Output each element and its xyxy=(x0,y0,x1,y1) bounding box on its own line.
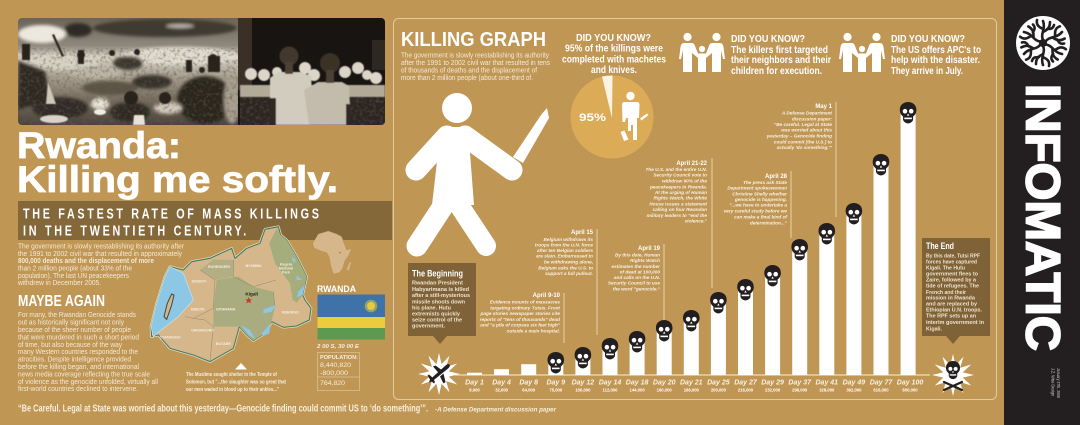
annotation: May 1: could commit [the U.S.] to xyxy=(774,139,832,144)
subtitle band: THE FASTEST RATE OF MASS KILLINGS xyxy=(23,205,319,222)
annotation: April 21-22: The U.S. and the entire U.N. xyxy=(646,167,707,172)
death counts: 328,000 xyxy=(819,388,835,392)
day labels: Day 18 xyxy=(626,380,648,386)
annotation: April 19: Rights Watch xyxy=(630,258,660,263)
annotation: April 19: and calls on the U.N. xyxy=(614,275,660,280)
intro text: The government is slowly reestablishing its authority xyxy=(401,52,549,59)
callout: the beginning: his plane. Hutu xyxy=(412,305,451,311)
annotation: April 9-10 xyxy=(480,293,564,343)
text block: maybe again: of time, but also because of the way xyxy=(18,342,122,349)
annotation: April 21-22: violence." xyxy=(685,219,708,224)
quote footer: -A Defense Department discussion paper xyxy=(435,406,556,414)
did you know: APCs: DID YOU KNOW? xyxy=(891,33,965,45)
annotation: April 28: April 28 xyxy=(765,174,788,180)
triangle marker xyxy=(235,363,247,370)
callout: the end: interim government in xyxy=(926,320,985,326)
annotation: April 21-22 xyxy=(646,158,712,288)
map of Rwanda: National xyxy=(279,267,293,271)
annotation: April 28: determination..." xyxy=(750,220,788,225)
map of Rwanda: GISENYI xyxy=(192,279,206,283)
death counts: 168,000 xyxy=(684,388,700,392)
intro text block: withdrew in December 2005. xyxy=(17,280,101,287)
day labels: Day 20 xyxy=(653,380,676,386)
credits: J.Z. Wise Design xyxy=(1050,368,1056,396)
callout: the beginning: after a still-mysterious xyxy=(412,293,470,299)
subtitle band: IN THE TWENTIETH CENTURY. xyxy=(23,222,246,239)
map of Rwanda: GIKONGORO xyxy=(191,328,214,332)
map of Rwanda: RUHENGERI xyxy=(208,265,230,269)
callout: the end xyxy=(922,238,990,344)
callout: the end: Kigali. xyxy=(926,326,942,332)
day labels: Day 77 xyxy=(870,380,893,386)
did you know: neighbors: DID YOU KNOW? xyxy=(731,33,805,45)
death counts: 216,000 xyxy=(738,388,754,392)
text block: maybe again: that were murdered in such a short period xyxy=(18,334,139,341)
map of Rwanda: KIBUYE xyxy=(191,307,205,311)
day labels: Day 100 xyxy=(897,380,923,386)
day labels: Day 41 xyxy=(816,380,838,386)
callout: the beginning: extremists quickly xyxy=(412,311,461,317)
callout: the end: The End xyxy=(926,241,954,251)
death counts: 8,000 xyxy=(469,388,480,392)
day labels: Day 1 xyxy=(465,380,484,386)
population box: 8,440,820 xyxy=(320,363,352,369)
map of Rwanda: CYANGUGU xyxy=(159,336,181,340)
text block: maybe again xyxy=(18,312,158,393)
panel: killing graph xyxy=(394,18,996,400)
annotation: May 1: yesterday – Genocide finding xyxy=(766,133,832,138)
callout: the beginning: missile shoots down xyxy=(412,299,465,305)
death counts: 200,000 xyxy=(711,388,727,392)
brand name: INFOMATIC xyxy=(1016,84,1070,351)
quote footer: “Be Careful. Legal at State was worried about this yesterday—Genocide finding could commit US to ‘do something’”. xyxy=(18,404,428,414)
title xyxy=(17,125,338,200)
callout: the end: government flees to xyxy=(926,272,979,278)
map caption: The Muslims sought shelter in the Temple of xyxy=(186,372,277,378)
callout: the end: Zaire, followed by a xyxy=(926,278,977,284)
map caption: our men waded in blood up to their ankles..." xyxy=(186,387,279,393)
intro text: after the 1991 to 2002 civil war that resulted in tens xyxy=(401,60,550,67)
intro text block: the 1991 to 2002 civil war that resulted in approximately xyxy=(18,251,182,258)
did you know: APCs: They arrive in July. xyxy=(891,65,963,77)
skulls xyxy=(548,102,916,373)
heading: Rwanda: RWANDA xyxy=(317,284,356,294)
death counts: 144,000 xyxy=(630,388,645,392)
annotation: April 15: be withdrawing alone, xyxy=(544,260,593,265)
did you know: neighbors: their neighbors and their xyxy=(731,54,831,66)
annotation: May 1: discussion paper: xyxy=(792,116,832,121)
callout: the beginning: government. xyxy=(412,323,445,329)
death counts: 100,000 xyxy=(575,388,591,392)
callout: the beginning xyxy=(408,263,476,344)
day labels xyxy=(465,380,923,386)
annotation: April 28: "...we have to undertake a xyxy=(729,203,787,208)
icon: family xyxy=(679,33,725,72)
callout: the end: Ethiopian U.N. troops. xyxy=(926,308,982,314)
credits xyxy=(1050,368,1061,398)
did you know: machetes: DID YOU KNOW? xyxy=(576,32,651,44)
callout: the beginning: The Beginning xyxy=(412,268,463,278)
annotation: April 15: troops from the U.N. force xyxy=(535,242,593,247)
death counts: 296,000 xyxy=(792,388,808,392)
map of Rwanda: BYUMBA xyxy=(246,264,262,268)
death counts: 800,000 xyxy=(902,388,918,392)
annotation: May 1: was worried about this xyxy=(781,128,832,133)
intro text: of thousands of deaths and the displacement of xyxy=(401,67,537,74)
pie chart: 95 percent xyxy=(570,76,654,158)
intro text block xyxy=(17,244,185,287)
bars xyxy=(467,110,916,375)
did you know: APCs: The US offers APC's to xyxy=(891,44,981,56)
text block: maybe again: because of the sheer number of people xyxy=(18,327,131,334)
annotation: April 19: April 19 xyxy=(638,246,661,252)
annotation: April 21-22: military leaders to "end the xyxy=(647,213,707,218)
sidebar xyxy=(1004,0,1080,425)
annotation: April 21-22: peacekeepers in Rwanda. xyxy=(649,184,707,189)
did you know: neighbors xyxy=(679,33,831,77)
death counts: 616,000 xyxy=(873,388,889,392)
day labels: Day 27 xyxy=(734,380,758,386)
map of Rwanda xyxy=(151,227,311,362)
map of Rwanda: Kigali xyxy=(245,292,258,297)
callout: the end: By this date, Tutsi RPF xyxy=(926,254,980,260)
annotation: May 1: A Defense Department xyxy=(781,110,832,115)
annotation: April 9-10: reports of "tens of thousands" dead xyxy=(480,317,560,322)
day labels: Day 37 xyxy=(788,380,812,386)
annotation: April 28: Christine Shelly whether xyxy=(732,191,788,196)
text block: maybe again: of violence as the genocide unfolded, virtually all xyxy=(18,379,158,386)
callout: the end: mission in Rwanda xyxy=(926,296,976,302)
annotation: April 19: the word "genocide." xyxy=(613,287,661,292)
icon: plane in starburst xyxy=(418,353,460,395)
annotation: April 21-22: Rights Watch, the White xyxy=(653,196,707,201)
annotation: April 15: Belgium withdraws its xyxy=(544,237,593,242)
annotation: April 28 xyxy=(724,171,791,238)
text block: maybe again: For many, the Rwandan Genocide stands xyxy=(18,312,136,319)
day labels: Day 8 xyxy=(519,380,538,386)
flag of Rwanda xyxy=(318,294,385,340)
annotation: April 15: are slain. Embarrassed to xyxy=(536,254,593,259)
map of Rwanda: GITARAMA xyxy=(216,307,236,311)
annotation: April 9-10: April 9-10 xyxy=(533,293,561,299)
text block: maybe again: atrocities. Despite intelligence provided xyxy=(18,357,131,364)
subtitle band xyxy=(18,201,392,240)
annotation: April 21-22: calling on four Rwandan xyxy=(653,207,707,212)
death counts: 112,000 xyxy=(603,388,618,392)
did you know: neighbors: The killers first targeted xyxy=(731,44,828,56)
annotation: April 21-22: April 21-22 xyxy=(676,161,708,167)
callout: the beginning: seize control of the xyxy=(412,317,462,323)
day labels: Day 12 xyxy=(572,380,594,386)
intro text xyxy=(401,52,550,82)
annotation: April 19: estimates the number xyxy=(612,264,661,269)
did you know: machetes: and knives. xyxy=(591,64,637,76)
death counts: 232,000 xyxy=(765,388,781,392)
annotation: April 9-10: outside a main hospital. xyxy=(507,328,560,333)
death counts: 32,000 xyxy=(495,388,509,392)
day labels: Day 29 xyxy=(761,380,784,386)
day labels: Day 4 xyxy=(492,380,511,386)
annotation: April 21-22: withdraw 90% of the xyxy=(662,178,707,183)
photo: two children before skulls xyxy=(238,18,385,125)
callout: the end: and are replaced by xyxy=(926,302,978,308)
pie chart: 95 percent: 95% xyxy=(579,112,606,124)
intro text block: 800,000 deaths and the displacement of more xyxy=(18,258,154,265)
photo strip: refugee camp and survivors xyxy=(18,18,385,125)
icon: figure with machete xyxy=(416,93,549,246)
text block: maybe again: many Western countries responded to the xyxy=(18,349,138,356)
map caption: Solomon, but "...the slaughter was so great that xyxy=(186,380,286,386)
annotation: April 9-10: and "a pile of corpses six feet high" xyxy=(480,323,561,328)
annotation: April 28: genocide is happening. xyxy=(734,197,787,202)
death counts: 64,000 xyxy=(522,388,536,392)
did you know: APCs: help with the disaster. xyxy=(891,54,980,66)
text block: maybe again: before the killing began, and international xyxy=(18,364,139,371)
did you know: APCs xyxy=(839,33,981,77)
callout: the beginning: Rwandan President xyxy=(412,281,463,287)
photo: refugee camp xyxy=(18,18,240,125)
title: Killing me softly. xyxy=(17,159,338,200)
annotation: May 1: actually 'do something.'" xyxy=(777,145,833,150)
annotation: April 28: The press ask State xyxy=(743,180,787,185)
coordinates: 2 00 S, 30 00 E xyxy=(316,344,360,350)
annotation: May 1: May 1 xyxy=(815,104,833,110)
population box: -800,000 xyxy=(320,371,349,377)
annotation: April 9-10: page stories newspaper stories cite xyxy=(480,311,560,316)
day labels: Day 49 xyxy=(843,380,865,386)
day labels: Day 14 xyxy=(599,380,621,386)
death counts: 75,000 xyxy=(549,388,563,392)
death counts: 392,000 xyxy=(846,388,862,392)
heading: maybe again: MAYBE AGAIN xyxy=(18,293,105,310)
logo xyxy=(1016,16,1070,70)
death counts xyxy=(469,388,918,392)
annotation: April 21-22: Security Council vote to xyxy=(653,173,707,178)
icon: person with severed limbs xyxy=(620,92,648,141)
callout: the end: forces have captured xyxy=(926,260,977,266)
day labels: Day 21 xyxy=(680,380,703,386)
map caption xyxy=(186,372,286,393)
callout: the end: French and their xyxy=(926,290,967,296)
intro text block: population). The last UN peacekeepers xyxy=(18,273,129,280)
intro text: more than 2 million people (about one-third of. xyxy=(401,75,533,82)
population box: POPULATION: xyxy=(320,355,358,361)
annotation: April 28: very careful study before we xyxy=(724,209,787,214)
annotation: April 9-10: Evidence mounts of massacres xyxy=(490,299,560,304)
intro text block: The government is slowly reestablishing its authority after xyxy=(18,244,185,250)
annotation: April 21-22: At the urging of Human xyxy=(654,190,707,195)
annotation: April 15: support a full pullout. xyxy=(545,271,593,276)
icon: family xyxy=(839,33,885,72)
annotation: April 19: Security Council to use xyxy=(608,281,660,286)
annotation: May 1: "Be careful. Legal at State xyxy=(774,122,832,127)
day labels: Day 25 xyxy=(707,380,730,386)
annotation: April 19 xyxy=(608,244,664,322)
annotation: April 28: Department spokeswoman xyxy=(727,186,787,191)
annotation: April 9-10: targeting ordinary Tutsis. Front xyxy=(490,305,560,310)
callout: the end: Kigali. The Hutu xyxy=(926,266,965,272)
population box: 764,820 xyxy=(320,381,346,387)
annotation: April 15: Belgium asks the U.S. to xyxy=(538,265,593,270)
heading: killing graph: KILLING GRAPH xyxy=(401,28,546,51)
annotation: April 15: April 15 xyxy=(571,230,594,236)
title: Rwanda: xyxy=(17,125,181,166)
annotation: April 19: By this date, Human xyxy=(615,252,660,257)
callout: the end: tide of refugees. The xyxy=(926,284,979,290)
text block: maybe again: news media coverage reflecting the true scale xyxy=(18,371,150,378)
callout: the beginning: Habyarimana is killed xyxy=(412,287,470,293)
locator map: Africa xyxy=(313,231,352,274)
text block: maybe again: first-world countries declined to intervene. xyxy=(18,386,138,393)
did you know: neighbors: children for execution. xyxy=(731,65,822,77)
map of Rwanda: KIBUNGO xyxy=(282,310,299,314)
credits: January 27th, 2008 xyxy=(1056,368,1061,398)
callout: the end: The RPF sets up an xyxy=(926,314,976,320)
map of Rwanda: Park xyxy=(282,271,291,275)
text block: maybe again: out as historically significant not only xyxy=(18,320,124,327)
did you know: machetes xyxy=(562,32,666,76)
map of Rwanda: Kagera xyxy=(280,263,293,267)
icon: skull and crossbones in starburst xyxy=(932,354,974,396)
intro text block: than 2 million people (about 33% of the xyxy=(18,266,132,272)
annotation: April 28: can make a final kind of xyxy=(734,214,787,219)
death counts: 160,000 xyxy=(657,388,672,392)
annotation: April 15 xyxy=(535,229,597,335)
map of Rwanda: BUTARE xyxy=(216,342,231,346)
annotation: May 1 xyxy=(766,102,836,217)
annotation: April 19: of dead at 100,000 xyxy=(620,269,660,274)
day labels: Day 9 xyxy=(546,380,565,386)
did you know: machetes: completed with machetes xyxy=(562,53,666,65)
bar chart: cumulative deaths by day xyxy=(455,102,930,392)
annotation: April 21-22: House issues a statement xyxy=(649,201,707,206)
population box xyxy=(318,352,360,390)
did you know: machetes: 95% of the killings were xyxy=(565,42,663,54)
annotation: April 15: after ten Belgian soldiers xyxy=(537,248,593,253)
